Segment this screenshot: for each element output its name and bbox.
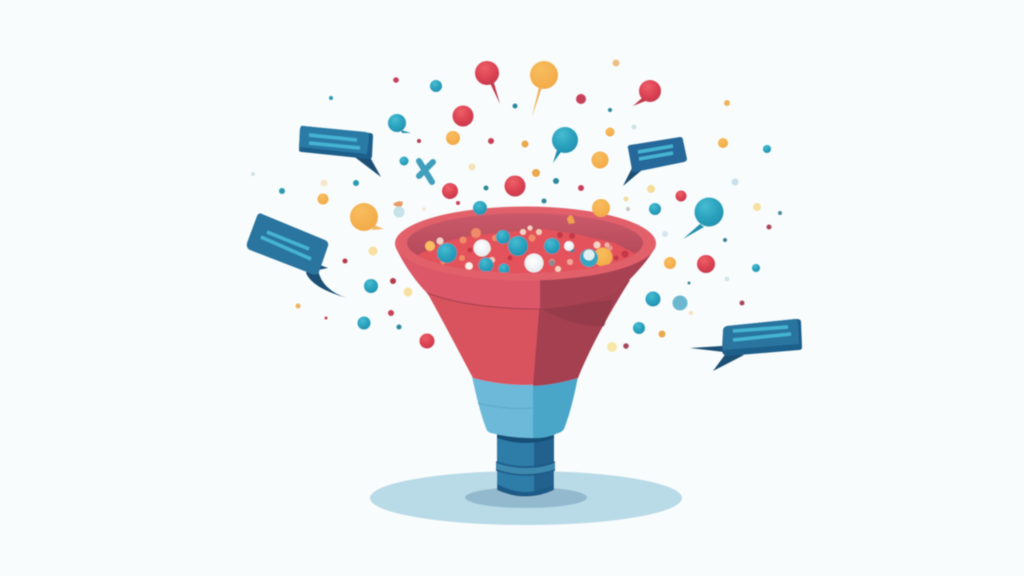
ground shadow <box>370 471 682 525</box>
pin: red right <box>633 80 661 106</box>
pin: teal small <box>388 114 411 133</box>
funnel <box>395 206 656 496</box>
speech bubble: bottom right <box>690 319 802 371</box>
pin: teal right <box>683 198 724 239</box>
red funnel cone <box>420 280 630 386</box>
funnel inner wall <box>407 213 643 273</box>
scattered pale particles <box>251 124 761 352</box>
pin: red top <box>475 61 500 104</box>
blue funnel neck <box>472 376 578 438</box>
scattered red particles <box>324 77 772 349</box>
illustration: funnel with particles and speech bubbles <box>246 59 803 526</box>
funnel rim <box>395 206 656 280</box>
artwork <box>247 60 802 525</box>
icon: teal cross <box>419 161 433 182</box>
pin: orange left <box>350 203 384 231</box>
scattered orange particles <box>296 60 730 338</box>
pin: orange top <box>530 61 558 117</box>
speech bubble: top left <box>299 126 381 177</box>
connector base <box>496 432 555 496</box>
speech bubble: left <box>247 213 347 298</box>
pin: teal center <box>552 127 578 163</box>
speech bubble: top right <box>623 137 687 186</box>
funnel contents <box>418 224 635 274</box>
funnel upper band <box>396 248 655 309</box>
scattered teal particles <box>279 80 782 334</box>
